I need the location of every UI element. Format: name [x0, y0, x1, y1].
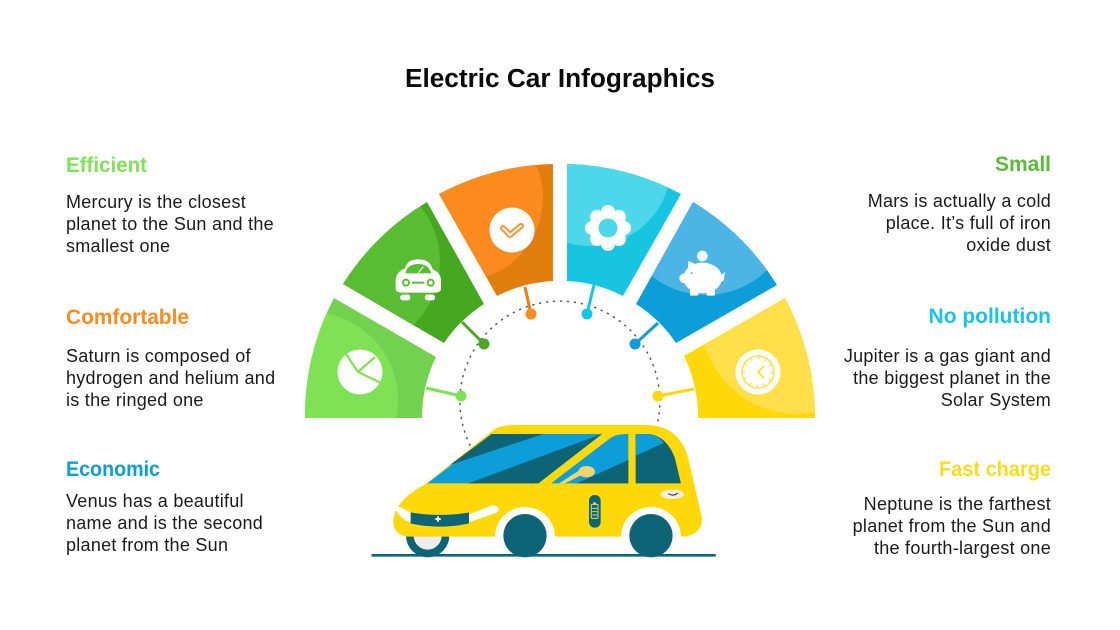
- side window: [551, 434, 628, 483]
- text block: Fast charge: Neptune is the farthest: [864, 494, 1051, 514]
- text block: Efficient: Mercury is the closest: [66, 192, 246, 212]
- text block: Small: place. It’s full of iron: [886, 213, 1051, 233]
- text block: Efficient: planet to the Sun and the: [66, 214, 274, 234]
- text block: Small: [868, 153, 1051, 255]
- connector: Efficient: [426, 388, 466, 402]
- icon: check badge: [490, 208, 534, 252]
- connector: Small car: [462, 322, 490, 350]
- text block: No pollution: the biggest planet in the: [853, 368, 1051, 388]
- segment: yellow: [684, 298, 815, 418]
- rear window: [636, 434, 681, 483]
- icon: clock: [736, 350, 780, 394]
- text block: Economic: name and is the second: [66, 513, 263, 533]
- text block: Small: oxide dust: [966, 235, 1051, 255]
- connector: Comfortable: [525, 287, 536, 320]
- text block: Economic: planet from the Sun: [66, 535, 228, 555]
- illustration: yellow electric car: [373, 425, 715, 557]
- connector: No pollution: [582, 285, 594, 320]
- text block: Comfortable: is the ringed one: [66, 390, 204, 410]
- text block: No pollution: Solar System: [941, 390, 1051, 410]
- ground line: [373, 551, 715, 559]
- text block: Fast charge: the fourth-largest one: [874, 538, 1051, 558]
- front wheel: [406, 514, 449, 557]
- text block: Small: Mars is actually a cold: [868, 191, 1051, 211]
- text block: No pollution: [844, 305, 1051, 410]
- text block: Economic: Economic: [66, 458, 160, 481]
- icon: flower: [585, 205, 631, 251]
- windshield: [427, 434, 602, 483]
- text block: Fast charge: Fast charge: [939, 458, 1051, 481]
- text block: Efficient: Efficient: [66, 154, 147, 177]
- icon: car: [396, 259, 441, 300]
- connector: Fast charge: [652, 389, 694, 402]
- title: Electric Car Infographics: [405, 63, 715, 93]
- segment: blue: [636, 202, 777, 343]
- dotted arc: [460, 301, 660, 445]
- icon: piggy bank: [679, 251, 725, 296]
- text block: Comfortable: [66, 306, 275, 410]
- text block: Efficient: [66, 154, 274, 256]
- segment: orange: [439, 164, 553, 296]
- text block: Efficient: smallest one: [66, 236, 170, 256]
- text block: Comfortable: hydrogen and helium and: [66, 368, 275, 388]
- wheel arches: [495, 507, 681, 537]
- text block: Comfortable: Comfortable: [66, 306, 189, 329]
- text block: No pollution: No pollution: [929, 305, 1051, 328]
- segment: green: [343, 202, 484, 343]
- segment: light green: [305, 298, 436, 418]
- rear wheels: [503, 514, 673, 557]
- text block: Economic: [66, 458, 263, 555]
- text block: Comfortable: Saturn is composed of: [66, 346, 251, 366]
- door handle: [661, 490, 684, 499]
- headlights and grille: [395, 505, 499, 527]
- text block: Small: Small: [995, 153, 1051, 176]
- car body: [393, 425, 702, 537]
- segment: cyan: [567, 164, 681, 296]
- connector: Economic: [630, 323, 658, 350]
- text block: Economic: Venus has a beautiful: [66, 491, 244, 511]
- text block: Fast charge: [853, 458, 1051, 558]
- text block: Fast charge: planet from the Sun and: [853, 516, 1051, 536]
- text block: No pollution: Jupiter is a gas giant and: [844, 346, 1051, 366]
- battery badge: [589, 495, 601, 528]
- icon: pie chart: [338, 350, 382, 394]
- mirror: [559, 466, 595, 483]
